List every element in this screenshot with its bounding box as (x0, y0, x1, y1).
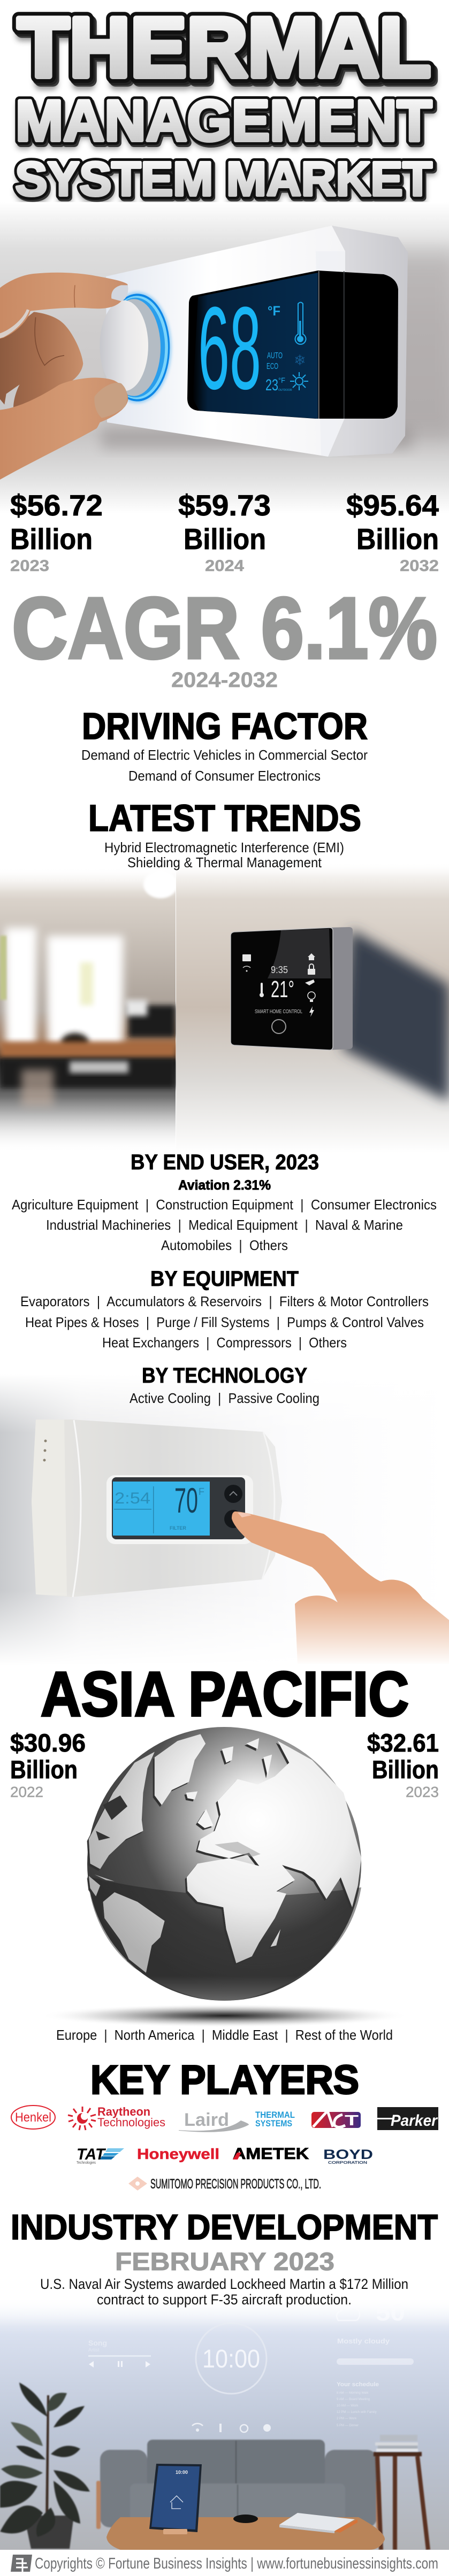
stool with books (374, 2435, 428, 2550)
industry development: FEBRUARY 2023 (115, 2247, 334, 2276)
logo: AMETEK: AMETEK (233, 2145, 309, 2163)
device icons (242, 953, 315, 1017)
phone on table (233, 2515, 258, 2523)
market value 2032: Billion (356, 522, 439, 556)
logo: Parker: Parker (391, 2112, 438, 2130)
market value 2023 (10, 489, 103, 575)
LCD display (106, 1475, 253, 1544)
mode labels: AUTO (267, 351, 283, 360)
blurred room (0, 869, 178, 1152)
wall (176, 862, 449, 1153)
industry development (11, 2207, 438, 2308)
logo: TAT Technologies: Technologies (77, 2161, 96, 2165)
region heading: Asia Pacific: ASIA PACIFIC (41, 1659, 409, 1730)
region value 2022: 2022 (10, 1784, 43, 1800)
logo: Henkel (11, 2105, 55, 2129)
title line: THERMAL: THERMAL (19, 3, 432, 97)
latest trends (88, 797, 361, 870)
wall HUD: Mostly cloudy (337, 2337, 390, 2345)
mode labels: OUTDOOR (278, 389, 292, 392)
device dial (272, 1020, 286, 1034)
mode labels: 23 (265, 376, 278, 394)
logo: Laird Thermal Systems: THERMAL (255, 2110, 295, 2120)
market value 2032: 2032 (400, 557, 439, 575)
title line: THERMAL: THERMAL (18, 1, 431, 95)
title line: SYSTEM MARKET: SYSTEM MARKET (15, 153, 432, 206)
LCD display: 70 (174, 1480, 198, 1520)
logo: TAT Technologies (77, 2146, 124, 2165)
market value 2024: 2024 (205, 557, 244, 575)
logo: Parker (377, 2107, 438, 2130)
region value 2023: Billion (372, 1755, 439, 1784)
by technology section (130, 1364, 319, 1406)
Mediterranean and seas (96, 1795, 261, 1857)
title line: MANAGEMENT: MANAGEMENT (17, 93, 433, 158)
by equipment section: Heat Pipes & Hoses | Purge / Fill Systems | Pumps & Control Valves (25, 1314, 424, 1330)
sofa (96, 2440, 380, 2529)
logo: Laird Thermal Systems: Laird (184, 2110, 229, 2130)
device time: 9:35 (271, 965, 288, 975)
wall HUD: Artist (88, 2347, 100, 2353)
market value 2024 (178, 489, 271, 575)
logo: Raytheon Technologies (68, 2105, 165, 2130)
logo: ACT (311, 2111, 361, 2128)
logo: Raytheon Technologies: Raytheon (97, 2105, 150, 2118)
icon: thermometer (295, 303, 306, 344)
market value 2024: $59.73 (178, 489, 271, 522)
LCD display: 2:54 (115, 1490, 150, 1507)
title line: MANAGEMENT: MANAGEMENT (16, 88, 432, 153)
logo: Sumitomo Precision Products (128, 2177, 321, 2192)
market value 2023: Billion (10, 522, 93, 556)
latest trends: Shielding & Thermal Management (127, 854, 322, 870)
title line: SYSTEM MARKET: SYSTEM MARKET (17, 157, 433, 211)
by technology section: Active Cooling | Passive Cooling (130, 1390, 319, 1406)
by end user section: Automobiles | Others (161, 1237, 288, 1253)
logo: Boyd Corporation: CORPORATION (328, 2160, 367, 2165)
wall HUD: 5 PM — Dinner (337, 2424, 359, 2427)
mode labels: °F (278, 376, 285, 384)
by equipment section: BY EQUIPMENT (150, 1267, 299, 1291)
wall HUD: 9 AM — Board Meeting (337, 2398, 370, 2401)
thermostat case (32, 1420, 282, 1597)
driving factor (81, 705, 368, 784)
degree unit: °F (268, 304, 280, 319)
key players heading: KEY PLAYERS (90, 2057, 359, 2103)
wall HUD: Song (88, 2339, 107, 2347)
title line: THERMAL: THERMAL (20, 9, 433, 103)
logo: Henkel: Henkel (15, 2110, 51, 2125)
icon: Fortune Business Insights logo (11, 2555, 32, 2572)
illustration: smart wall thermostat in room (0, 862, 449, 1153)
driving factor: Demand of Consumer Electronics (128, 768, 321, 784)
shadow behind device (343, 929, 449, 1101)
blue ring and dial (100, 292, 172, 403)
pointing finger and hand (232, 1511, 449, 1664)
region value 2023: $32.61 (367, 1729, 439, 1757)
market value 2023: 2023 (10, 557, 49, 575)
CAGR figure: 2024-2032 (171, 668, 278, 692)
market value 2032 (346, 489, 439, 575)
title line: THERMAL: THERMAL (21, 4, 434, 98)
logo: Boyd Corporation (323, 2147, 373, 2165)
title line: THERMAL: THERMAL (18, 1, 431, 95)
region value 2022: $30.96 (10, 1729, 86, 1757)
market value 2032: $95.64 (346, 489, 439, 522)
thermostat screen (187, 271, 398, 419)
title line: SYSTEM MARKET: SYSTEM MARKET (15, 153, 432, 206)
by end user section (12, 1151, 437, 1253)
latest trends: Hybrid Electromagnetic Interference (EMI) (104, 839, 344, 855)
wall HUD: 12 PM — Lunch with Family (337, 2411, 377, 2414)
thermostat screen: 68 (198, 282, 261, 414)
by end user section: BY END USER, 2023 (131, 1151, 319, 1174)
logo: TAT Technologies: TAT (77, 2146, 106, 2163)
potted plant (0, 2382, 90, 2549)
books on table (279, 2513, 357, 2533)
continents (89, 1734, 361, 1973)
by equipment section (20, 1267, 429, 1351)
by end user section: Industrial Machineries | Medical Equipment | Naval & Marine (46, 1217, 403, 1233)
icon: snowflake: ❄ (294, 352, 306, 368)
by equipment section: Heat Exchangers | Compressors | Others (102, 1335, 347, 1351)
by end user section: Aviation 2.31% (178, 1178, 271, 1193)
logo: Raytheon Technologies: Technologies (97, 2116, 165, 2129)
globe ground shadow (40, 2004, 409, 2027)
wall HUD: Your schedule (337, 2381, 379, 2388)
market value 2023: $56.72 (10, 489, 103, 522)
title (15, 1, 434, 211)
driving factor: DRIVING FACTOR (82, 705, 368, 747)
logo: Laird Thermal Systems (179, 2110, 295, 2132)
industry development: contract to support F-35 aircraft production. (97, 2292, 352, 2308)
thermostat body (106, 226, 408, 457)
wall HUD: 8 AM — Morning Walk (337, 2392, 369, 2395)
title line: MANAGEMENT: MANAGEMENT (17, 90, 433, 156)
by technology section: BY TECHNOLOGY (142, 1364, 307, 1387)
title line: MANAGEMENT: MANAGEMENT (16, 88, 432, 153)
region value 2023 (367, 1729, 439, 1800)
latest trends: LATEST TRENDS (88, 797, 361, 839)
coffee table (106, 2517, 385, 2550)
device temperature: 21° (271, 976, 294, 1002)
region value 2022: Billion (10, 1755, 78, 1784)
wall HUD: 2 PM — Work (337, 2417, 357, 2420)
wall HUD: 50 (376, 2300, 405, 2326)
tablet: 10:00 (176, 2470, 188, 2475)
logo: Sumitomo Precision Products: SUMITOMO PRECISION PRODUCTS CO., LTD. (150, 2177, 321, 2192)
company logos (11, 2105, 438, 2192)
mode labels: ECO (267, 362, 278, 371)
logo: Honeywell: Honeywell (137, 2146, 219, 2162)
logo: Laird Thermal Systems: SYSTEMS (255, 2118, 292, 2128)
wall HUD: 10:00 (202, 2345, 260, 2373)
hand (0, 273, 128, 480)
wall HUD (88, 2300, 414, 2432)
region value 2022 (10, 1729, 86, 1800)
illustration: hand turning thermostat dial (0, 202, 449, 513)
region value 2023: 2023 (406, 1784, 439, 1800)
illustration: finger pressing wall thermostat (0, 1374, 449, 1665)
wall HUD: 10 AM — Work (337, 2404, 359, 2408)
logo: Boyd Corporation: BOYD (323, 2147, 373, 2162)
LCD display: F (199, 1486, 204, 1497)
logo: ACT: T (345, 2112, 359, 2128)
other regions list: Europe | North America | Middle East | Rest of the World (56, 2027, 393, 2043)
mode labels (265, 351, 292, 394)
illustration: smart home living room (0, 2297, 449, 2550)
title line: SYSTEM MARKET: SYSTEM MARKET (17, 155, 433, 208)
by equipment section: Evaporators | Accumulators & Reservoirs | Filters & Motor Controllers (20, 1293, 429, 1309)
market value 2024: Billion (184, 522, 266, 556)
thermostat device (231, 927, 353, 1050)
LCD display: FILTER (170, 1525, 186, 1531)
device caption: SMART HOME CONTROL (255, 1009, 302, 1015)
globe (87, 1727, 361, 2001)
driving factor: Demand of Electric Vehicles in Commercial Sector (81, 747, 368, 763)
footer (0, 2550, 449, 2576)
icon: sun (290, 372, 308, 390)
tablet (149, 2464, 202, 2534)
industry development: U.S. Naval Air Systems awarded Lockheed Martin a $172 Million (40, 2276, 408, 2292)
